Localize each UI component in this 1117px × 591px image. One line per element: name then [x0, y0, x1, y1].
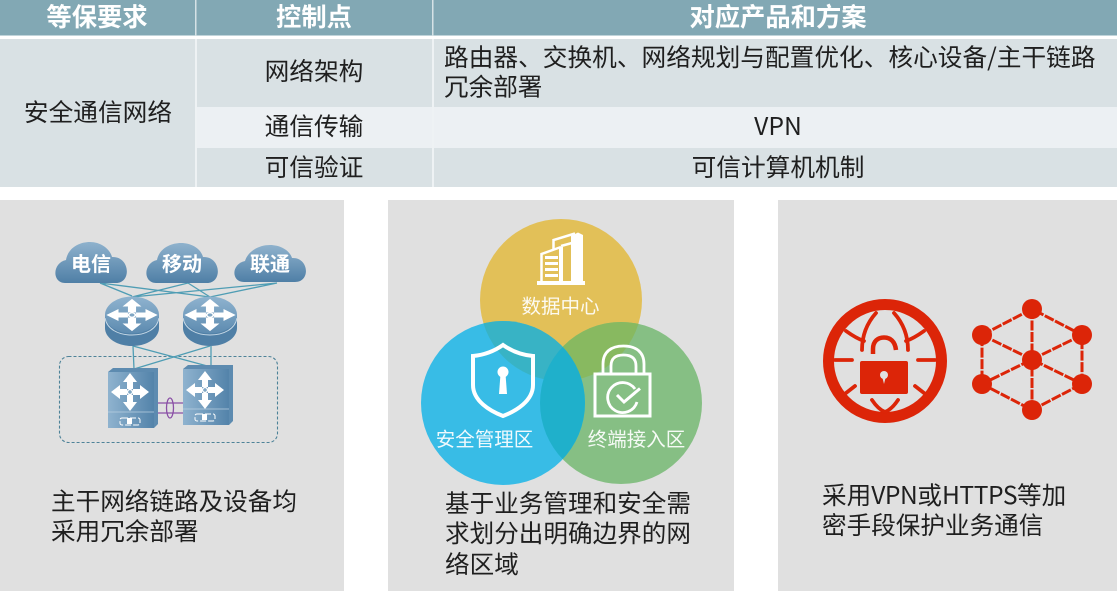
- label: data center: 数据中心: [521, 290, 600, 319]
- comparison table: [0, 0, 1117, 187]
- row: communication transport: 通信传输: [265, 107, 364, 143]
- dashed core zone: [60, 356, 278, 442]
- panel caption: 络区域: [445, 545, 519, 581]
- row: trusted verification: [265, 148, 864, 184]
- table body backgrounds: [0, 39, 1117, 187]
- cloud: China Telecom: [55, 242, 127, 283]
- icon: dashed node network: [972, 299, 1092, 420]
- switch right: [183, 365, 233, 425]
- circle: terminal access: [540, 322, 702, 484]
- icon: lock with check: [595, 346, 650, 416]
- network topology diagram: [55, 242, 306, 442]
- requirement cell: 安全通信网络: [24, 93, 172, 129]
- panel caption: 基于业务管理和安全需: [445, 484, 691, 520]
- circle: security management: [421, 321, 585, 485]
- venn diagram: [421, 219, 702, 485]
- row: communication transport: VPN: [754, 107, 802, 143]
- row: network architecture: 路由器、交换机、网络规划与配置优化、核心设备/主干链路: [444, 38, 1096, 74]
- row: network architecture: [265, 38, 1096, 104]
- cloud: China Mobile: [146, 243, 218, 283]
- router right: [183, 296, 237, 346]
- panel caption: [51, 482, 297, 548]
- table header row: [0, 0, 1117, 36]
- panel caption: 求划分出明确边界的网: [445, 514, 691, 550]
- cloud: China Telecom: 电信: [71, 248, 111, 277]
- overlaps: [484, 321, 638, 460]
- cloud: China Unicom: [234, 245, 306, 282]
- cloud: China Unicom: 联通: [250, 248, 290, 277]
- icon: globe with lock: [828, 304, 942, 418]
- row: network architecture: 冗余部署: [444, 68, 542, 104]
- router left: [105, 296, 159, 346]
- redundant purple link: [157, 398, 184, 418]
- panel caption: [445, 484, 691, 581]
- label: security management: 安全管理区: [436, 423, 533, 452]
- panel: redundant network: [0, 200, 344, 591]
- panel: network zones: [388, 200, 734, 591]
- switch left: [108, 368, 158, 428]
- link lines: [100, 283, 277, 369]
- panel caption: 主干网络链路及设备均: [51, 482, 297, 518]
- icon: building: [537, 232, 585, 285]
- panel caption: 密手段保护业务通信: [822, 506, 1043, 542]
- icon: shield with keyhole: [473, 345, 533, 416]
- row: trusted verification: 可信计算机机制: [692, 148, 864, 184]
- cloud: China Mobile: 移动: [162, 248, 202, 277]
- panel caption: [822, 476, 1066, 542]
- panel caption: 采用冗余部署: [51, 512, 199, 548]
- row: communication transport: [265, 107, 802, 143]
- label: terminal access: 终端接入区: [588, 423, 685, 452]
- circle: data center: [480, 219, 642, 381]
- panel caption: 采用VPN或HTTPS等加: [822, 476, 1066, 512]
- panel: encrypted communication: [778, 200, 1117, 591]
- row: network architecture: 网络架构: [265, 52, 363, 88]
- row: trusted verification: 可信验证: [265, 148, 363, 184]
